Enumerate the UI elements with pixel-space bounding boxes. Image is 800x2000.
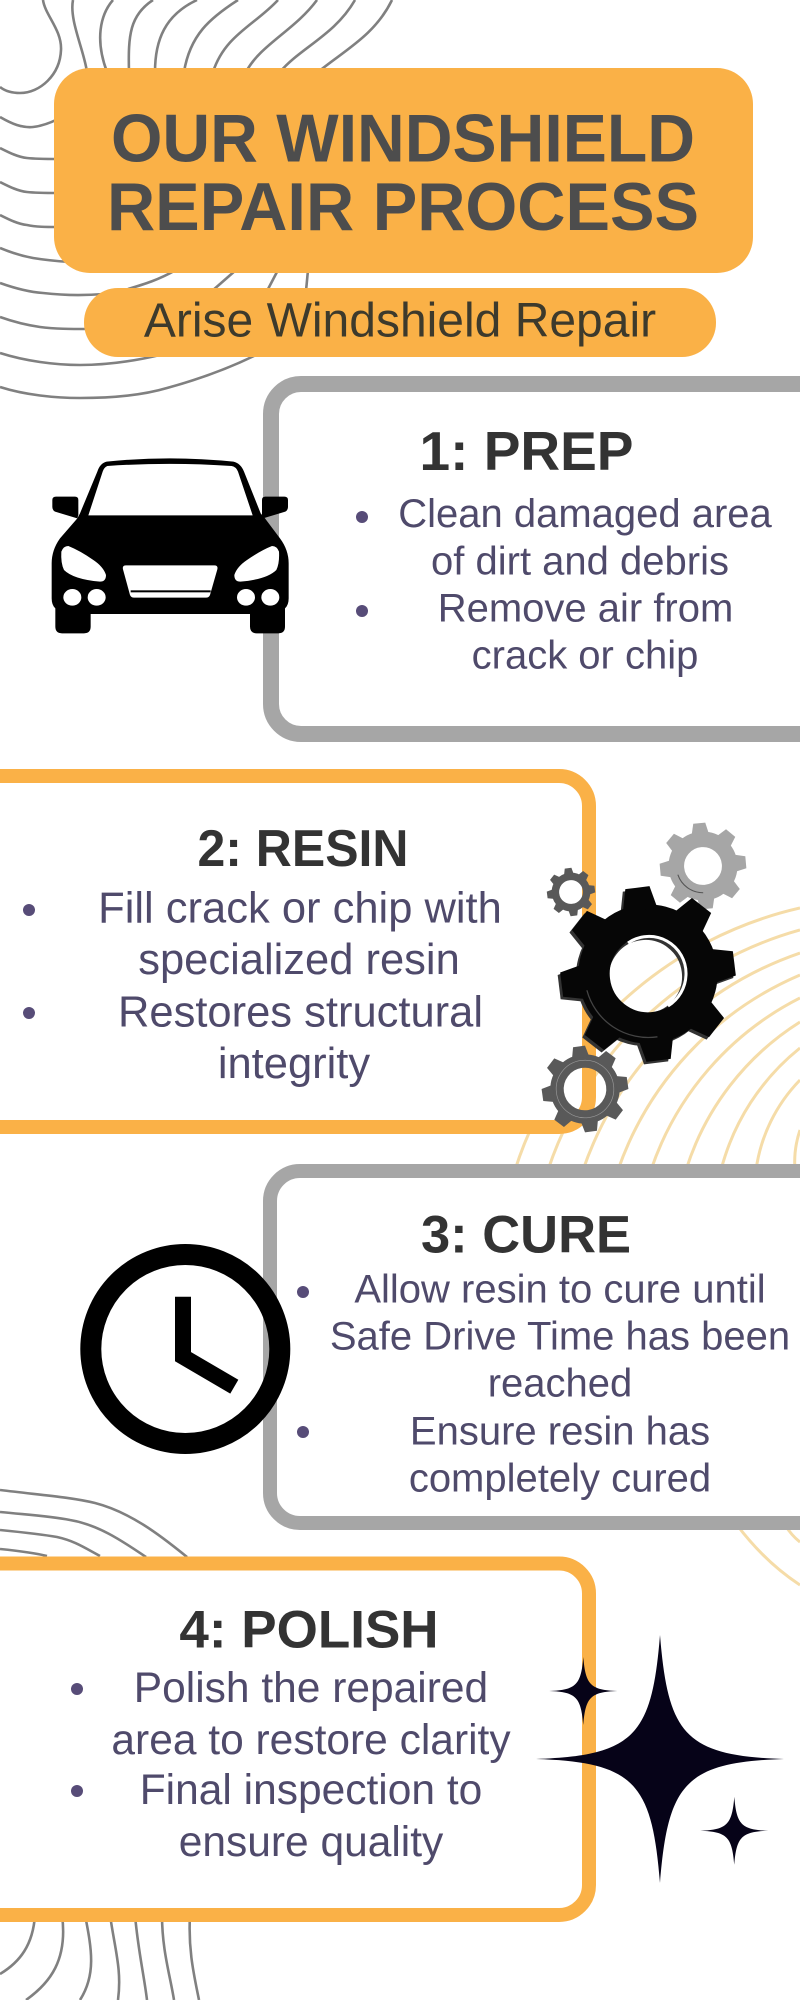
panel: step 2 resin xyxy=(0,776,589,1127)
background contour lines: bottom left xyxy=(0,1915,199,2000)
text block: step 4 bullets xyxy=(71,1665,511,1866)
heading: 2: RESIN: 2: RESIN xyxy=(198,820,408,878)
icon: gears xyxy=(536,819,750,1138)
icon: gear hole highlight xyxy=(628,936,686,1006)
text block: step 3 bullets xyxy=(297,1268,790,1500)
icon: car front xyxy=(52,458,289,633)
panel: step 1 prep xyxy=(271,384,800,734)
text block: step 1 bullets: crack or chip xyxy=(472,634,698,678)
text block: step 1 bullets: Remove air from xyxy=(438,586,733,630)
background contour lines: top left xyxy=(0,0,392,398)
text block: step 4 bullets: Polish the repaired xyxy=(134,1665,488,1712)
text block: step 4 bullets: ensure quality xyxy=(179,1819,444,1866)
text block: step 1 bullets: of dirt and debris xyxy=(431,540,729,584)
title text: OUR WINDSHIELD xyxy=(111,100,695,176)
text block: step 2 bullets: integrity xyxy=(218,1040,370,1088)
text block: step 2 bullets xyxy=(23,884,502,1088)
icon: large black gear xyxy=(551,877,745,1071)
subtitle pill xyxy=(84,288,716,357)
text block: step 2 bullets: Restores structural xyxy=(118,988,483,1036)
subtitle text: Arise Windshield Repair xyxy=(144,294,656,348)
text block: step 1 bullets xyxy=(356,492,773,678)
heading: 4: POLISH: 4: POLISH xyxy=(179,1600,439,1660)
heading: 3: CURE: 3: CURE xyxy=(421,1206,631,1264)
icon: large black gear shadow xyxy=(549,880,742,1073)
text block: step 1 bullets: Clean damaged area xyxy=(398,492,773,536)
icon: small dark gear xyxy=(544,865,598,919)
text block: step 4 bullets: Final inspection to xyxy=(140,1767,482,1814)
icon: clock xyxy=(91,1254,280,1444)
icon: bottom dark gear xyxy=(536,1040,634,1138)
heading: 1: PREP: 1: PREP xyxy=(420,420,633,482)
text block: step 4 bullets: area to restore clarity xyxy=(111,1717,511,1764)
background arcs: orange right side xyxy=(515,908,800,1585)
panel: step 4 polish xyxy=(0,1564,589,1915)
text block: step 3 bullets: Allow resin to cure until xyxy=(354,1268,766,1312)
icon: sparkles xyxy=(536,1635,784,1883)
text block: step 3 bullets: completely cured xyxy=(409,1456,711,1500)
title banner xyxy=(54,68,753,273)
text block: step 3 bullets: Ensure resin has xyxy=(410,1410,710,1454)
text block: step 3 bullets: reached xyxy=(488,1362,632,1406)
icon: gray gear xyxy=(656,819,750,913)
text block: step 2 bullets: Fill crack or chip with xyxy=(98,884,502,932)
text block: step 3 bullets: Safe Drive Time has been xyxy=(330,1314,790,1358)
background contour lines: left above step 4 xyxy=(0,1490,187,1557)
text block: step 2 bullets: specialized resin xyxy=(138,936,460,984)
title text: REPAIR PROCESS xyxy=(107,169,699,245)
panel: step 3 cure xyxy=(270,1171,800,1523)
title text xyxy=(107,100,699,245)
